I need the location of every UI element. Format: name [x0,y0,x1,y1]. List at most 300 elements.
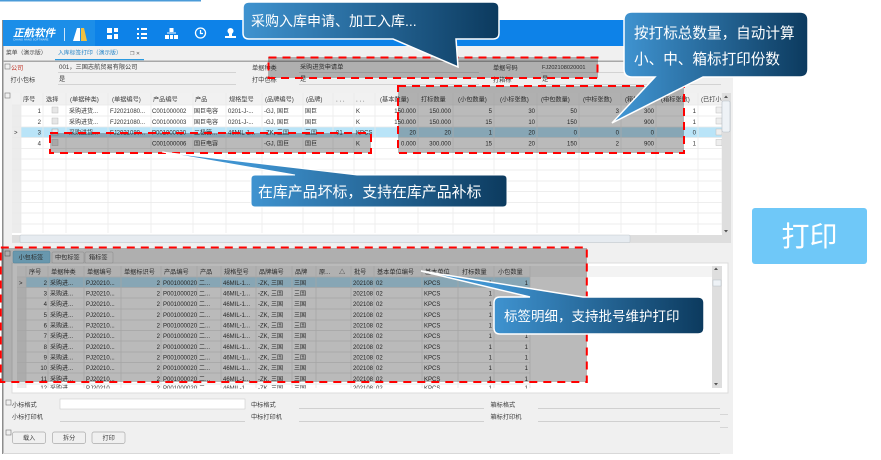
row 3 selected: 0 [616,130,620,136]
lower row 12 clipped [40,384,527,388]
highlight: print quantities [398,86,684,153]
lower row 6: 46MIL-1... [223,324,250,330]
lower row 3: 1 [489,292,493,298]
lower row 7: 二... [199,334,210,340]
lower row 9: 202108 [353,356,374,362]
header form [5,63,721,85]
header form: 打中包标 [252,76,277,84]
lower row 6: 采购进... [50,322,73,330]
lower row 4: 02 [376,302,383,308]
row 1: 国巨 [305,108,317,115]
print settings form: 中标打印机 [251,413,283,421]
lower row 2: -ZK, 三国 [258,280,283,287]
highlight: document type [268,57,598,78]
lower row 11: -ZK, 三国 [258,376,283,383]
table header: 产品 [195,96,207,104]
header form: 采购进货申请单 [300,63,343,71]
top decorative tab edge [0,0,201,2]
lower row 3: 02 [376,292,383,298]
lower row 2: 202108 [353,281,374,287]
lower row 3 [44,290,493,298]
row 2: 150 [567,120,578,126]
print settings form: 小标打印机 [12,413,44,421]
lower row 12 clipped: 2 [157,386,161,392]
lower row 2: 1 [525,281,529,287]
lower row 3: 3 [44,292,48,298]
row 4: 15 [485,142,493,148]
lower row 7 [44,332,529,340]
header form: 打小包标 [10,76,35,84]
app top bar: CHANG HANG SOFTWARE [13,38,49,42]
lower row 11 [41,375,529,383]
lower row 8: P001000020 [163,345,198,351]
lower row 12 clipped: 三国 [294,385,306,392]
row 2: 150.000 [394,120,417,126]
lower row 6: 三国 [294,322,306,330]
row 3 selected: 46MIL-1... [228,130,255,136]
lower table header: 原... [319,269,331,276]
app top bar: 正航软件 [13,26,56,40]
table header: 序号 [23,96,35,104]
lower row 2: PJ20210... [86,281,115,287]
callout: label details batch printing: 标签明细，支持批号维护打印 [504,308,680,324]
row 1: 国巨电容 [194,107,218,115]
lower row 2: 46MIL-1... [223,281,250,287]
table header: (已打小 [701,96,722,104]
lower row 7: KPCS [424,334,440,340]
lower row 5 [44,311,493,319]
lower row 7: 46MIL-1... [223,334,250,340]
sub tabs [13,251,113,263]
lower row 7: 7 [44,334,48,340]
lower row 10: PJ20210... [86,366,115,372]
icon: clock [196,28,206,38]
print badge [752,208,867,264]
header form: 单据号码 [493,64,518,72]
row 3 selected: 01 [336,130,343,136]
lower row 5: 02 [376,313,383,319]
row 2: 2 [38,120,42,126]
lower row 11: 2 [157,377,161,383]
lower row 3: 采购进... [50,290,73,298]
lower row 6: 6 [44,324,48,330]
lower row 5: 2 [157,313,161,319]
callout: damaged stock labels [162,152,507,207]
lower row 8: 三国 [294,344,306,351]
lower row 2: 三国 [294,280,306,287]
lower row 9: -ZK, 三国 [258,354,283,362]
lower row 9: 46MIL-1... [223,356,250,362]
lower row 4: KPCS [424,302,440,308]
lower row 11: PJ20210... [86,377,115,383]
print settings form: 箱标打印机 [490,413,522,421]
lower row 12 clipped: P001000020 [163,386,198,392]
lower row 7: 1 [489,334,493,340]
row 1: FJ2021080... [110,109,145,115]
lower row 4: 2 [157,302,161,308]
row 2: FJ2021080... [110,120,145,126]
print settings form [6,399,728,428]
lower row 7: 2 [157,334,161,340]
row 3 selected: 20 [528,130,536,136]
row 3 selected: -ZK, 三国 [264,130,289,136]
highlight: label details [1,248,587,382]
icon: grid [107,28,118,39]
lower row 3: KPCS [424,292,440,298]
lower row 12 clipped: 采购进... [50,384,73,392]
lower row 6: 02 [376,324,383,330]
lower row 9: P001000020 [163,356,198,362]
row 2: -GJ, 国巨 [264,119,289,126]
table header: (单据种类) [70,96,99,104]
lower row 3: 三国 [294,290,306,298]
lower row 12 clipped: 1 [489,386,493,392]
lower row 11: 46MIL-1... [223,377,250,383]
upper scrollbars [12,93,731,243]
lower row 3: 202108 [353,292,374,298]
lower row 10: 采购进... [50,364,73,372]
lower row 12 clipped: -ZK, 三国 [258,385,283,392]
lower row 3: 46MIL-1... [223,292,250,298]
row 2: C001000003 [152,120,187,126]
row 1: C001000002 [152,109,187,115]
header form: 001，三国志航贸易有限公司 [59,63,137,71]
lower row 7: 202108 [353,334,374,340]
lower table header: △ [339,268,345,276]
lower row 11: 三国 [294,376,306,383]
lower row 2 [19,279,529,287]
callout: purchase inbound: 采购入库申请、加工入库... [251,13,417,29]
lower row 10: 1 [525,366,529,372]
icon: org chart [165,28,178,39]
lower row 6: KPCS [424,324,440,330]
lower row 10: 02 [376,366,383,372]
lower row 4 [44,300,493,308]
lower table header: 产品 [200,268,212,276]
row 1: 30 [528,109,536,115]
row 3 selected: 0 [651,130,655,136]
upper data table [5,93,731,243]
row 4: 0.000 [401,142,417,148]
breadcrumb tabs: 菜单（演示版） [6,48,47,56]
lower row 4: -ZK, 三国 [258,301,283,308]
table header: 打标数量 [421,96,446,104]
lower row 11: 1 [525,377,529,383]
lower row 7: -ZK, 三国 [258,333,283,340]
lower row 4: P001000020 [163,302,198,308]
lower row 2: 1 [489,281,493,287]
row 1: 3 [616,109,620,115]
lower row 8: 02 [376,345,383,351]
row 2: 900 [644,120,655,126]
icon: user stamp [225,28,236,38]
lower row 10: 二... [199,366,210,372]
row 1: 1 [38,109,42,115]
lower row 7: PJ20210... [86,334,115,340]
row 3 selected: 二极管... [194,128,217,136]
lower row 2: 2 [157,281,161,287]
row 4: 1 [693,142,697,148]
row 1: K [356,109,360,115]
table header: (单据编号) [112,96,141,104]
lower table header: 打标数量 [462,268,487,276]
lower row 2: P001000020 [163,281,198,287]
sub tabs: 小包标签 [18,254,43,262]
lower row 10: 202108 [353,366,374,372]
callout: label details batch printing [421,271,704,334]
table header: (品牌) [306,96,322,104]
lower row 3: PJ20210... [86,292,115,298]
lower row 8: 二... [199,345,210,351]
lower row 2: KPCS [424,281,440,287]
row 4: 国巨电容 [194,140,218,148]
row 4: 国巨 [305,140,317,148]
lower row 7: 02 [376,334,383,340]
software window screenshot [2,20,735,454]
table header: (品牌编号) [265,96,294,104]
lower table header: 规格型号 [224,268,249,276]
table header: 规格型号 [229,96,254,104]
lower table header: 产品编号 [164,268,189,276]
lower row 2: > [19,281,23,287]
row 3 selected: KPCS [356,130,372,136]
print badge: 打印 [781,221,838,252]
lower row 11: P001000020 [163,377,198,383]
lower row 10: 2 [157,366,161,372]
print settings form: 中标格式 [251,401,276,409]
lower row 10: KPCS [424,366,440,372]
callout: auto calculate copies: 小、中、箱标打印份数 [634,51,780,68]
table header: . . . [336,96,345,104]
lower row 11: KPCS [424,377,440,383]
table header [23,96,722,104]
lower row 3: 2 [157,292,161,298]
lower row 2: 采购进... [50,279,73,287]
lower row 11: 采购进... [50,375,73,383]
lower row 8: 1 [489,345,493,351]
table header: (箱标张数) [661,96,690,104]
lower row 5: KPCS [424,313,440,319]
lower row 9: 2 [157,356,161,362]
lower row 4: 46MIL-1... [223,302,250,308]
action buttons: 打印 [102,434,115,442]
header form: 打箱标 [493,76,512,84]
row 1: 0201-J-... [228,109,254,115]
lower row 8: -ZK, 三国 [258,344,283,351]
lower row 9: 二... [199,356,210,362]
row 2: 1 [693,120,697,126]
lower row 7: P001000020 [163,334,198,340]
row 1: 150.000 [394,109,417,115]
highlight: in-stock product row [50,133,371,153]
breadcrumb tabs: ❐ ✕ [130,51,140,57]
lower table header: 品牌 [295,268,307,276]
lower row 10: 三国 [294,365,306,372]
lower row 6: 1 [489,324,493,330]
callout: auto calculate copies: 按打标总数量，自动计算 [634,25,795,42]
breadcrumb tabs [3,48,733,62]
lower row 6 [44,322,529,330]
lower row 2: 二... [199,281,210,287]
row 2: 国巨 [305,119,317,126]
row 2: 150.000 [429,120,452,126]
lower row 7: 三国 [294,333,306,340]
row 3 selected: 0 [693,130,697,136]
lower row 12 clipped: 二... [199,386,210,392]
lower table header: 批号 [354,268,366,276]
lower row 4: 二... [199,302,210,308]
lower row 8 [44,343,529,351]
row 4: -GJ, 国巨 [264,140,289,148]
row 1: 采购进货... [69,107,98,115]
lower table header [29,268,523,276]
lower table header: 单据编号 [87,268,112,276]
lower row 9: 02 [376,356,383,362]
callout: purchase inbound [243,2,499,67]
lower row 10: -ZK, 三国 [258,365,283,372]
row 2: 15 [485,120,493,126]
row 4: 900 [644,142,655,148]
row 4: 20 [528,142,536,148]
lower row 5: 5 [44,313,48,319]
lower row 10: 10 [40,366,48,372]
row 2: 10 [528,120,536,126]
lower table header: 单据种类 [51,268,76,276]
action buttons [3,430,720,454]
row 1: 1 [693,109,697,115]
app top bar [3,20,735,46]
sub tabs: 箱标签 [89,254,108,262]
lower row 2: 2 [44,281,48,287]
lower row 8: KPCS [424,345,440,351]
row 4: 4 [38,142,42,148]
row 3 selected: > [14,130,18,136]
lower row 12 clipped: PJ20210... [86,386,115,392]
lower row 11: 二... [199,377,210,383]
breadcrumb tabs: 入库标签打印（演示版） [58,48,122,56]
lower row 3: 二... [199,292,210,298]
table header: 产品编号 [153,96,178,104]
lower row 6: P001000020 [163,324,198,330]
row 2: 0201-J-... [228,120,254,126]
lower row 6: 202108 [353,324,374,330]
row 4: 300.000 [429,142,452,148]
lower row 5: 46MIL-1... [223,313,250,319]
table header: 选择 [46,96,59,104]
row 2: 国巨电容 [194,118,218,126]
table header: (基本数量) [380,96,409,104]
lower row 9: 9 [44,356,48,362]
row 3 selected: 采购进货... [69,128,98,136]
row 3 selected: P001000020 [152,130,187,136]
header form: 是 [59,76,65,83]
lower row 2: 02 [376,281,383,287]
row 1 [38,107,722,115]
row 3 selected [14,128,722,136]
lower table header: 基本单位 [425,268,450,276]
row 2: K [356,120,360,126]
lower row 9: 1 [525,356,529,362]
lower row 5: 二... [199,313,210,319]
row 1: -GJ, 国巨 [264,108,289,115]
lower row 4: 202108 [353,302,374,308]
lower row 5: -ZK, 三国 [258,312,283,319]
print settings form: 箱标格式 [490,401,515,409]
callout: damaged stock labels: 在库产品坏标，支持在库产品补标 [258,184,481,201]
row 2: 采购进货... [69,118,98,126]
lower row 12 clipped: 46MIL-1... [223,386,250,392]
lower row 3: -ZK, 三国 [258,290,283,298]
lower table header: 基本单位编号 [377,268,414,276]
row 3 selected: 三国 [305,130,317,136]
lower detail panel [5,251,728,393]
header form: 是 [300,76,306,83]
action buttons: 载入 [23,434,35,442]
lower table header: 序号 [29,268,41,276]
lower table header: 品牌编号 [259,268,284,276]
lower row 7: 采购进... [50,332,73,340]
header form: 单据种类 [252,64,277,72]
lower row 5: 三国 [294,312,306,319]
table header: (小标张数) [500,96,529,104]
lower row 6: 二... [199,324,210,330]
lower row 8: 2 [157,345,161,351]
row 4: 2 [616,142,620,148]
lower row 9 [44,354,529,362]
lower row 6: -ZK, 三国 [258,322,283,330]
lower row 10: 1 [489,366,493,372]
table header: (中标张数) [583,96,612,104]
lower table header: 单据标识号 [124,268,155,276]
lower row 12 clipped: 1 [525,386,529,392]
lower row 9: PJ20210... [86,356,115,362]
lower row 5: PJ20210... [86,313,115,319]
row 1: 300 [644,109,655,115]
row 1: 5 [489,109,493,115]
callout: auto calculate copies [612,12,808,123]
lower row 7: 1 [525,334,529,340]
lower row 12 clipped: 12 [40,386,48,392]
lower row 5: P001000020 [163,313,198,319]
row 3 selected: FJ2021080... [110,130,145,136]
lower row 8: PJ20210... [86,345,115,351]
table header: (箱标数量) [625,96,654,104]
header form: 是 [542,76,548,83]
lower row 8: 8 [44,345,48,351]
lower row 9: KPCS [424,356,440,362]
row 3 selected: 1 [489,130,493,136]
lower row 11: 1 [489,377,493,383]
lower row 11: 202108 [353,377,374,383]
table header: . . . [356,96,365,104]
row 3 selected: 20 [409,130,417,136]
lower row 12 clipped: 02 [376,386,383,392]
row 2 [38,118,722,126]
row 3 selected: 20 [444,130,452,136]
lower row 8: 1 [525,345,529,351]
lower row 9: 1 [489,356,493,362]
header form: 公司 [11,65,23,72]
table header: (中包数量) [541,96,570,104]
lower row 5: 采购进... [50,311,73,319]
lower scrollbar [712,266,722,388]
row 1: 150.000 [429,109,452,115]
lower row 8: 采购进... [50,343,73,351]
lower row 6: 2 [157,324,161,330]
print settings form: 小标格式 [12,401,37,409]
row 4: 150 [567,142,578,148]
lower row 6: PJ20210... [86,324,115,330]
